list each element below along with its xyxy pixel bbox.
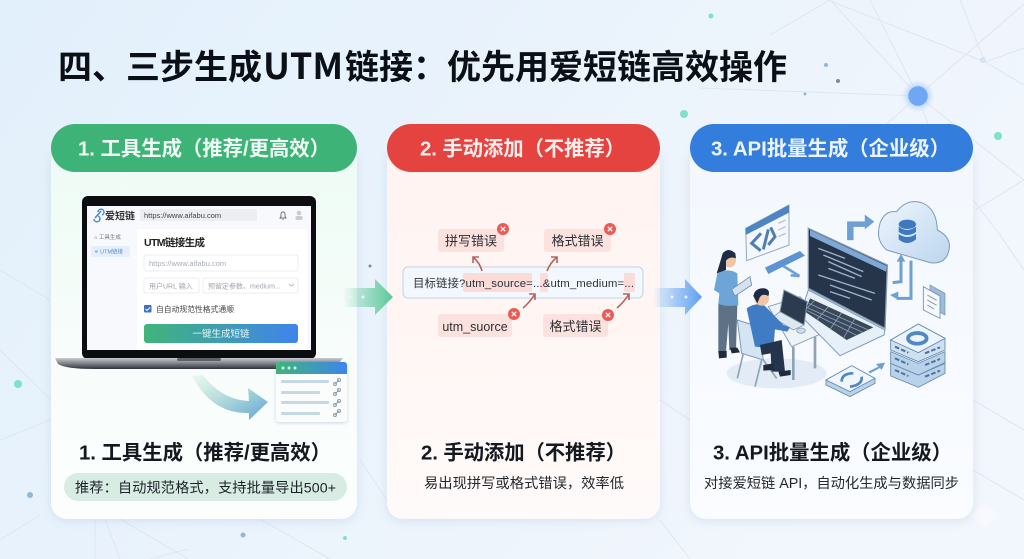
sync arrows to cloud (847, 215, 874, 240)
recommendation pill (64, 473, 347, 501)
arrow: step 2 to step 3 (653, 279, 702, 315)
floor shadow (727, 358, 827, 388)
error tag: format bottom: 格式错误 (549, 319, 602, 334)
mouse (797, 328, 805, 333)
cloud with database (878, 202, 949, 263)
small laptop (773, 290, 807, 330)
link example box: 目标链接?utm_source=...&utm_medium=... (413, 276, 634, 290)
server stack (891, 324, 945, 387)
documents (923, 285, 945, 318)
generate button (144, 324, 298, 343)
panel: tool generation (51, 124, 357, 519)
card 1 subheading: 1. 工具生成（推荐/更高效） (79, 440, 331, 464)
title: 四、三步生成 (58, 49, 262, 87)
title: UTM (263, 38, 343, 90)
error tag: utm typo (438, 308, 520, 337)
parameter inputs: 预留定参数、medium... (208, 282, 281, 290)
logo: 爱短链 (105, 210, 135, 222)
error tag: spelling (438, 223, 509, 252)
export list window (276, 362, 347, 422)
sidebar menu: ⚭ UTM链接 (94, 248, 124, 256)
API illustration (714, 202, 949, 397)
laptop mockup (55, 196, 343, 369)
form heading: UTM链接生成 (144, 236, 206, 249)
link example box (403, 267, 643, 298)
sidebar menu (94, 233, 124, 256)
url bar: https://www.aifabu.com (144, 211, 221, 220)
vertical sync arrows (893, 260, 911, 298)
card 3 subheading: 3. API批量生成（企业级） (713, 440, 952, 464)
panel: API batch generation (690, 124, 973, 519)
card 2 header pill (387, 124, 660, 172)
error tag: spelling: 拼写错误 (445, 234, 497, 248)
card 3 background (690, 146, 973, 519)
curved export arrow (192, 375, 268, 420)
seated person (737, 288, 791, 387)
card 1 background (51, 146, 357, 519)
error tag: format top: 格式错误 (551, 234, 604, 248)
arrow: step 1 to step 2 (343, 279, 393, 315)
card 2 description: 易出现拼写或格式错误，效率低 (424, 475, 624, 492)
title: 链接：优先用爱短链高效操作 (345, 49, 787, 87)
recommendation pill: 推荐：自动规范格式，支持批量导出500+ (75, 480, 336, 496)
checkbox: 自自动规范性格式通顺 (156, 304, 234, 314)
card 3 description: 对接爱短链 API，自动化生成与数据同步 (704, 475, 959, 492)
sidebar menu: ⌂ 工具生成 (94, 233, 121, 241)
card 2 header pill: 2. 手动添加（不推荐） (420, 138, 625, 160)
tile to server arrow (868, 363, 885, 373)
generate button: 一键生成短链 (192, 328, 250, 340)
sync tile (826, 366, 875, 397)
card 3 header pill: 3. API批量生成（企业级） (711, 136, 950, 160)
code window (746, 205, 789, 261)
parameter inputs: 用户URL 输入 (149, 282, 193, 290)
url input: https://www.aifabu.com (149, 259, 226, 268)
standing person (714, 250, 752, 358)
error tag: format top (544, 223, 616, 252)
logo (94, 209, 135, 222)
card 3 header pill (690, 124, 973, 172)
desk (768, 297, 830, 380)
api strip (765, 251, 805, 276)
error tag: utm typo: utm_suorce (442, 320, 508, 334)
parameter inputs (144, 278, 298, 293)
laptop large (800, 228, 887, 356)
bell and user icons (280, 211, 302, 220)
error arrows (473, 257, 629, 308)
url input (144, 255, 298, 271)
card 2 subheading: 2. 手动添加（不推荐） (421, 442, 626, 464)
error tag: format bottom (543, 309, 614, 337)
panel: manual adding (387, 124, 660, 519)
card 1 header pill: 1. 工具生成（推荐/更高效） (78, 136, 330, 160)
url bar (140, 209, 257, 221)
card 2 background (387, 146, 660, 519)
card 1 header pill (51, 124, 357, 172)
